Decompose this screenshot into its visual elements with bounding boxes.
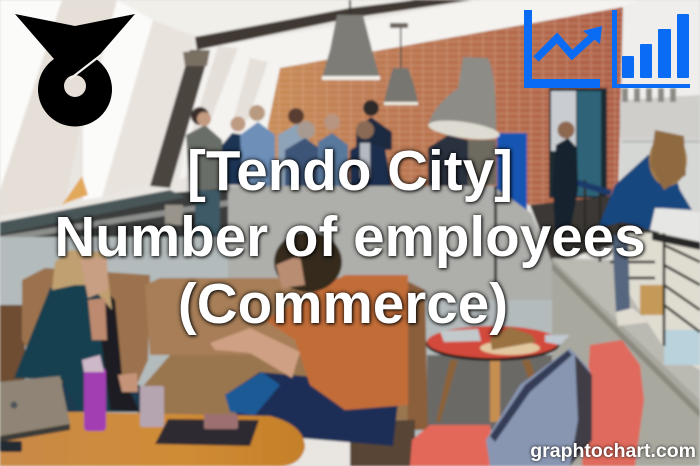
glass of water <box>140 386 164 427</box>
woman standing at right <box>598 130 700 326</box>
backpack <box>486 348 592 466</box>
roof beams <box>150 0 472 188</box>
leather sofa <box>0 268 428 466</box>
people in background <box>186 100 496 190</box>
title line 3: (Commerce) <box>178 272 508 335</box>
door <box>549 88 607 198</box>
ceiling and left slanted panels <box>0 0 480 216</box>
stairs and floor <box>530 176 700 466</box>
man on sofa <box>210 232 408 446</box>
rail and dark lower left band <box>0 188 228 242</box>
coffee table <box>0 412 305 466</box>
title line 2: Number of employees <box>54 205 646 268</box>
icon: line chart with arrow <box>524 10 602 88</box>
standing man <box>553 122 578 230</box>
woman on sofa <box>14 250 142 412</box>
city emblem logo <box>15 14 135 126</box>
purple water bottle <box>82 355 106 431</box>
inner ceiling and window recesses <box>180 0 640 180</box>
brick wall <box>268 7 623 205</box>
watermark: graphtochart.com <box>530 440 696 462</box>
icon: bar chart <box>612 10 690 88</box>
right wall with frames <box>620 0 700 233</box>
title line 1: [Tendo City] <box>187 139 513 202</box>
laptop <box>0 376 70 442</box>
side table with bread <box>426 326 570 422</box>
concrete partition and wall <box>0 186 552 437</box>
tablet and phones <box>0 414 259 452</box>
hanging lamps <box>322 0 501 143</box>
blue cabinet <box>497 133 527 217</box>
red chairs <box>410 340 644 466</box>
